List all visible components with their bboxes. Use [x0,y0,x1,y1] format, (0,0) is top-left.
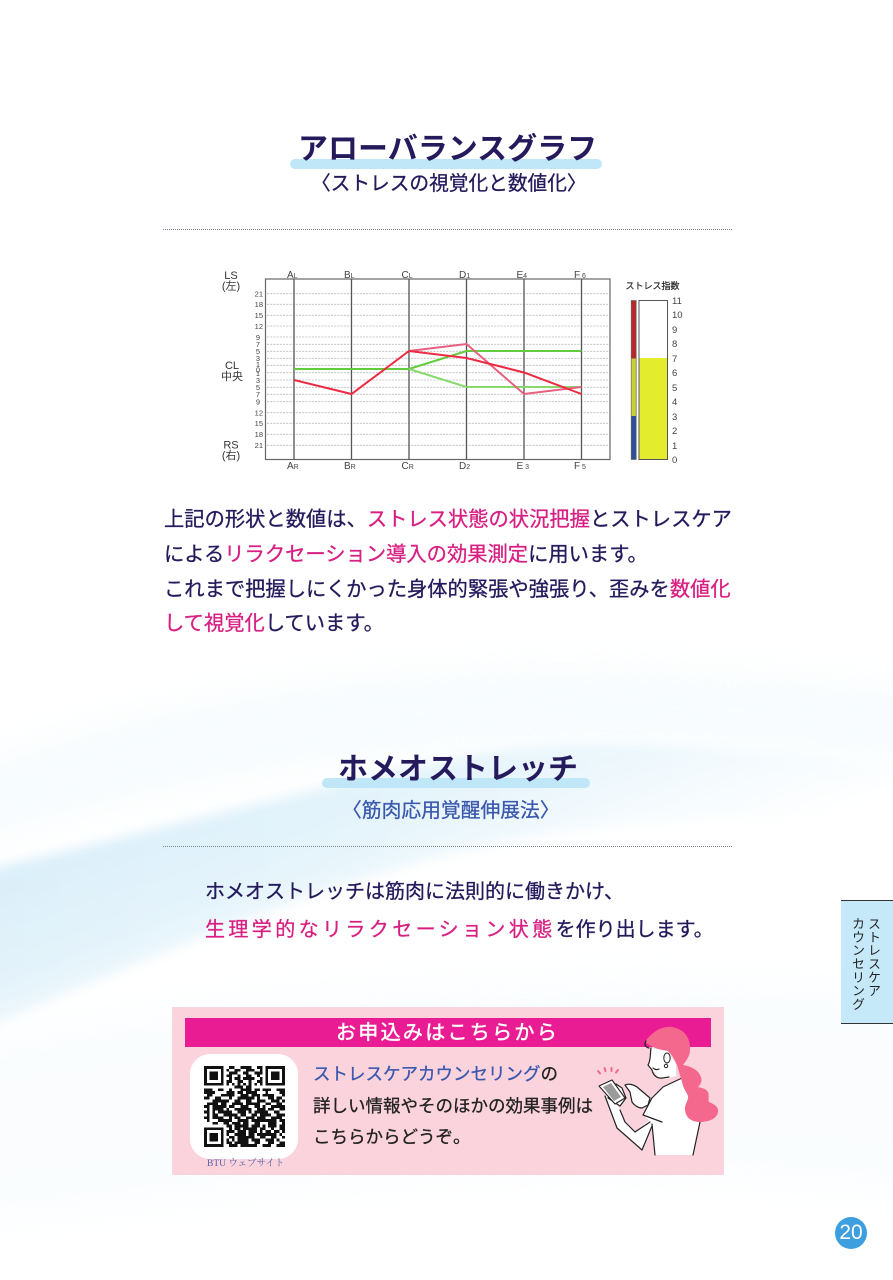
axis labels: E 3 [516,461,529,472]
heading text: アローバランスグラフ [298,133,597,166]
right hand [625,1084,650,1108]
scale numbers: 3 [256,354,260,363]
stress index: 9 [672,325,677,336]
axis labels: CR [402,461,414,472]
axis labels: F 6 [574,270,586,281]
scale numbers: 18 [255,300,263,309]
axis labels: F 5 [574,461,586,472]
hair [645,1027,718,1122]
plot frame [266,279,610,460]
stress index: 0 [672,455,677,466]
ear [664,1053,670,1063]
text block: stretch description: ホメオストレッチは筋肉に法則的に働きかけ、 [205,881,624,903]
icon: woman using phone [597,1026,718,1156]
side labels: (右) [222,448,240,462]
text block: chart description [164,508,732,634]
side labels: (左) [222,280,240,292]
scale numbers: 15 [255,419,263,428]
scale numbers: 12 [255,322,263,331]
stress index: 10 [672,310,683,321]
scale numbers: 1 [256,360,260,369]
panel text: こちらからどうぞ。 [313,1127,470,1147]
panel text [313,1064,593,1147]
stress index: 8 [672,339,677,350]
scale numbers: 9 [256,333,260,342]
stress index [625,280,683,466]
face [648,1048,676,1079]
scale numbers: 7 [256,390,260,399]
stress index: 11 [672,296,682,307]
page number: 20 [839,1221,863,1244]
chart: arrow balance graph [221,270,683,472]
subheading: ストレスの視覚化と数値化: 〈ストレスの視覚化と数値化〉 [311,173,587,195]
scale numbers: 12 [255,408,263,418]
axis labels: BR [344,461,356,472]
heading text: ホメオストレッチ [338,753,578,786]
heading highlight bar [290,159,602,169]
scale numbers: 15 [255,311,263,320]
axis labels: D2 [459,461,470,472]
stress index: 4 [672,397,677,408]
heading: ホメオストレッチ [322,753,590,788]
panel: application [172,1007,724,1175]
scale numbers: 3 [256,376,260,385]
stress index: ストレス指数 [625,280,680,291]
scale numbers [255,290,263,450]
scale numbers: 5 [256,383,260,392]
axis labels: E4 [516,270,527,281]
scale numbers: 7 [256,340,260,349]
stress index: 6 [672,368,677,379]
axis labels: BL [344,270,355,281]
banner text: お申込みはこちらから [336,1022,559,1044]
shirt [643,1078,700,1155]
axis labels: AR [287,461,299,472]
scale numbers: 1 [256,369,260,378]
scale numbers: 21 [255,441,263,450]
axis labels: D1 [459,270,470,281]
subheading: 筋肉応用覚醒伸展法: 〈筋肉応用覚醒伸展法〉 [342,800,560,822]
stress index: 5 [672,383,677,394]
stress index: 3 [672,412,677,423]
stress index: 1 [672,441,677,452]
red stress lines [294,344,582,394]
side labels: CL [225,360,239,372]
side tab text: ストレスケア カウンセリング [850,917,881,1011]
scale numbers: 0 [256,366,260,374]
notification sparks [598,1068,618,1074]
side labels [221,270,243,462]
heading highlight bar [322,778,590,788]
side labels: LS [224,270,238,282]
heading: アローバランスグラフ [290,132,602,169]
scale numbers: 21 [255,290,263,298]
text block: stretch description [205,880,714,941]
stress index: 7 [672,354,677,365]
scale numbers: 18 [255,430,263,439]
text block: chart description: 上記の形状と数値は、ストレス状態の状況把握とストレスケア [164,508,732,530]
left hand [608,1084,626,1106]
stress index: 2 [672,426,677,437]
green balance lines [294,351,582,387]
QR code [204,1066,285,1147]
text block: chart description: によるリラクセーション導入の効果測定に用います。 [164,544,648,566]
side labels: RS [223,440,239,452]
panel text: ストレスケアカウンセリングの [313,1064,558,1084]
side labels: 中央 [221,370,243,383]
text block: chart description: これまで把握しにくかった身体的緊張や強張り、歪みを数値化 [164,578,731,600]
axis labels: CL [402,270,413,281]
axis labels [287,270,586,472]
axis labels: AL [287,270,298,281]
phone [599,1080,625,1104]
text block: stretch description: 生理学的なリラクセーション状態を作り出します。 [205,919,714,941]
panel text: 詳しい情報やそのほかの効果事例は [313,1096,593,1116]
scale numbers: 9 [256,398,260,406]
page number [835,1217,867,1249]
QR card [190,1054,298,1159]
side tab [841,900,893,1024]
scale numbers: 5 [256,347,260,356]
text block: chart description: して視覚化しています。 [164,612,384,634]
background: pale blue waves [0,739,809,1024]
arm [605,1095,652,1150]
panel banner [185,1018,711,1047]
QR caption: BTU ウェブサイト [207,1159,284,1169]
